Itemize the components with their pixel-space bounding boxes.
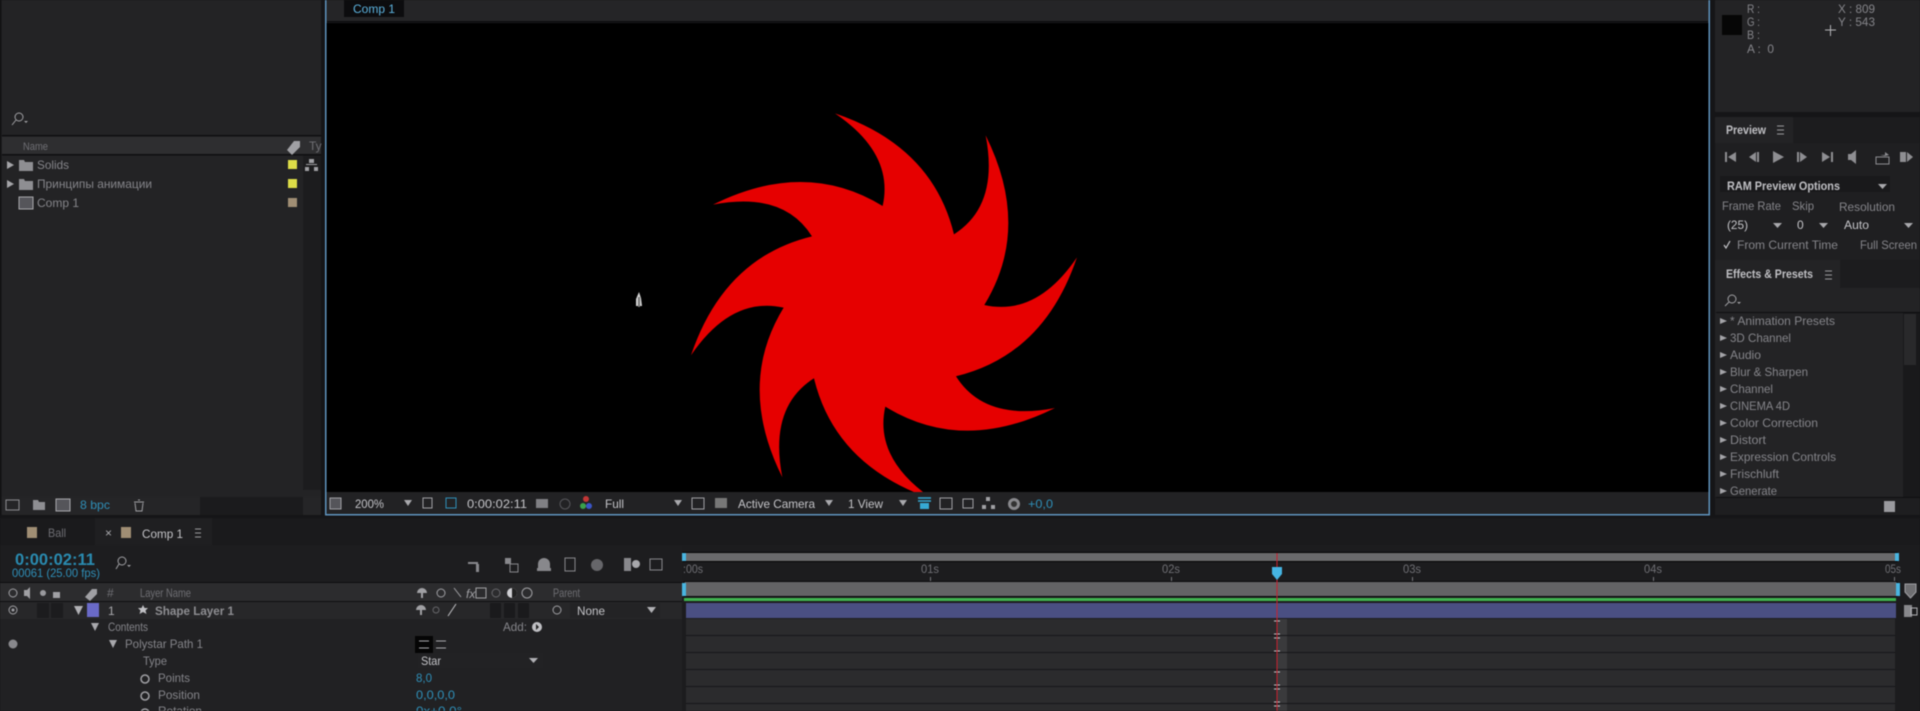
property: Rotation — [141, 704, 462, 711]
layer row: Shape Layer 1: None — [577, 604, 605, 618]
property: Contents: Add: — [503, 620, 527, 634]
viewer toolbar: +0,0 — [1028, 497, 1053, 511]
property track rows — [686, 619, 1895, 711]
project bottom toolbar — [2, 497, 321, 515]
property: Contents — [91, 620, 542, 634]
layer row: Shape Layer 1 — [0, 602, 682, 619]
time ruler: 02s — [1162, 562, 1180, 576]
project column header: Name — [23, 141, 48, 153]
info coordinates: X : 809 — [1838, 2, 1875, 16]
project column header — [2, 135, 322, 156]
preview values: Auto — [1844, 218, 1869, 232]
project item: folder — [7, 177, 297, 191]
time ruler: 05s — [1885, 562, 1901, 576]
project bottom toolbar: 8 bpc — [80, 498, 110, 512]
preview options — [1724, 238, 1917, 252]
icon: timeline search — [116, 557, 131, 569]
viewer toolbar: 1 View — [848, 497, 883, 511]
property: Type: Star — [421, 654, 441, 668]
viewer toolbar: 0:00:02:11 — [467, 497, 527, 511]
property: Position: 0,0,0,0 — [416, 688, 455, 702]
playhead — [1272, 553, 1282, 711]
project item: folder: Принципы анимации — [37, 177, 152, 191]
tab: Ball — [27, 526, 66, 540]
layer column header: Layer Name — [140, 586, 191, 600]
preview values: 0 — [1797, 218, 1804, 232]
effects list: * Animation Presets — [1730, 314, 1835, 328]
layer column header: Parent — [553, 586, 581, 600]
current time display — [12, 550, 100, 580]
preview options: Full Screen — [1860, 238, 1917, 252]
current time display: 0:00:02:11 — [15, 550, 95, 569]
icon: effects search — [1725, 295, 1741, 306]
viewer canvas — [326, 23, 1709, 492]
viewer toolbar: 200% — [355, 497, 384, 511]
keyframe markers — [1274, 621, 1280, 711]
info RGBA values: G : — [1747, 15, 1760, 29]
preview options: From Current Time — [1737, 238, 1838, 252]
effects list: Expression Controls — [1730, 450, 1836, 464]
tab: Comp 1 — [105, 526, 201, 541]
green cache line — [684, 598, 1896, 601]
viewer toolbar: Active Camera — [738, 497, 815, 511]
time ruler: 01s — [921, 562, 939, 576]
layer bar — [686, 603, 1896, 618]
effects list: 3D Channel — [1730, 331, 1791, 345]
tab: Comp 1: × — [105, 526, 112, 540]
layer column header — [0, 582, 682, 602]
layer row: Shape Layer 1: Shape Layer 1 — [155, 604, 234, 618]
project item: Comp 1 — [19, 196, 297, 210]
layer row: Shape Layer 1: 1 — [108, 604, 115, 618]
info RGBA values — [1747, 2, 1774, 56]
property: Type — [143, 653, 543, 668]
project item: Comp 1: Comp 1 — [37, 196, 79, 210]
icon: project search — [12, 113, 28, 125]
property: Position: Position — [158, 688, 200, 702]
right track margin icons — [1904, 584, 1917, 617]
layer column header: fx — [466, 587, 476, 601]
effects list — [1720, 314, 1836, 498]
property: Polystar Path 1 — [8, 636, 446, 653]
effects tab title: Effects & Presets — [1726, 267, 1813, 281]
panel: timeline tabs — [0, 518, 1920, 545]
preview labels: Frame Rate — [1722, 199, 1781, 213]
panel: info — [1715, 0, 1920, 112]
time ruler: 04s — [1644, 562, 1662, 576]
effects list: Frischluft — [1730, 467, 1780, 481]
tab: Comp 1: Comp 1 — [142, 527, 183, 541]
viewer tab: Comp 1: Comp 1 — [353, 2, 395, 16]
panel: preview — [1715, 117, 1920, 260]
preview labels — [1722, 199, 1895, 214]
effects list: CINEMA 4D — [1730, 399, 1790, 413]
time navigator bar — [682, 552, 1899, 562]
effects scrollbar — [1903, 313, 1920, 497]
property: Points — [141, 671, 432, 685]
preview values: (25) — [1727, 218, 1748, 232]
effects list: Channel — [1730, 382, 1773, 396]
panel: timeline tracks — [682, 545, 1920, 711]
star shape — [691, 113, 1077, 499]
work area bar — [682, 582, 1900, 596]
tab: Ball: Ball — [48, 526, 66, 540]
preview transport controls — [1725, 150, 1913, 164]
project item: Solids — [7, 158, 297, 172]
effects list: Generate — [1730, 484, 1777, 498]
preview values — [1727, 218, 1913, 232]
RAM preview dropdown: RAM Preview Options — [1727, 179, 1840, 193]
viewer tab: Comp 1 — [344, 0, 404, 17]
time ruler — [683, 562, 1901, 581]
layer column header: # — [107, 586, 114, 600]
RAM preview dropdown — [1720, 176, 1890, 193]
preview labels: Resolution — [1839, 200, 1895, 214]
panel: composition viewer — [325, 0, 1710, 516]
panel: effects and presets — [1715, 260, 1920, 515]
time ruler: :00s — [683, 562, 703, 576]
property: Points: 8,0 — [416, 671, 432, 685]
property: Type: Type — [143, 654, 167, 668]
effects list: Color Correction — [1730, 416, 1818, 430]
property: Contents: Contents — [108, 620, 148, 634]
effects footer — [1715, 497, 1920, 515]
timeline switch icons — [468, 558, 662, 572]
effects list: Audio — [1730, 348, 1761, 362]
info RGBA values: B : — [1747, 28, 1760, 42]
panel: timeline layer outline — [0, 545, 682, 711]
effects list: Distort — [1730, 433, 1767, 447]
info coordinates — [1825, 2, 1875, 36]
property: Position — [141, 688, 455, 702]
effects list: Blur & Sharpen — [1730, 365, 1808, 379]
time ruler: 03s — [1403, 562, 1421, 576]
preview tab title: Preview — [1726, 123, 1767, 137]
project column header: Ty — [309, 139, 322, 153]
project item: Solids: Solids — [37, 158, 69, 172]
property: Polystar Path 1: Polystar Path 1 — [125, 637, 203, 651]
preview labels: Skip — [1792, 199, 1814, 213]
info RGBA values: A : 0 — [1747, 42, 1774, 56]
current time display: 00061 (25.00 fps) — [12, 566, 100, 580]
cursor icon — [636, 292, 642, 307]
viewer toolbar: Full — [605, 497, 624, 511]
icon: flowchart — [305, 159, 318, 171]
viewer toolbar — [325, 0, 1710, 516]
panel: project — [0, 0, 322, 515]
property: Points: Points — [158, 671, 190, 685]
info coordinates: Y : 543 — [1838, 15, 1875, 29]
info RGBA values: R : — [1747, 2, 1760, 16]
